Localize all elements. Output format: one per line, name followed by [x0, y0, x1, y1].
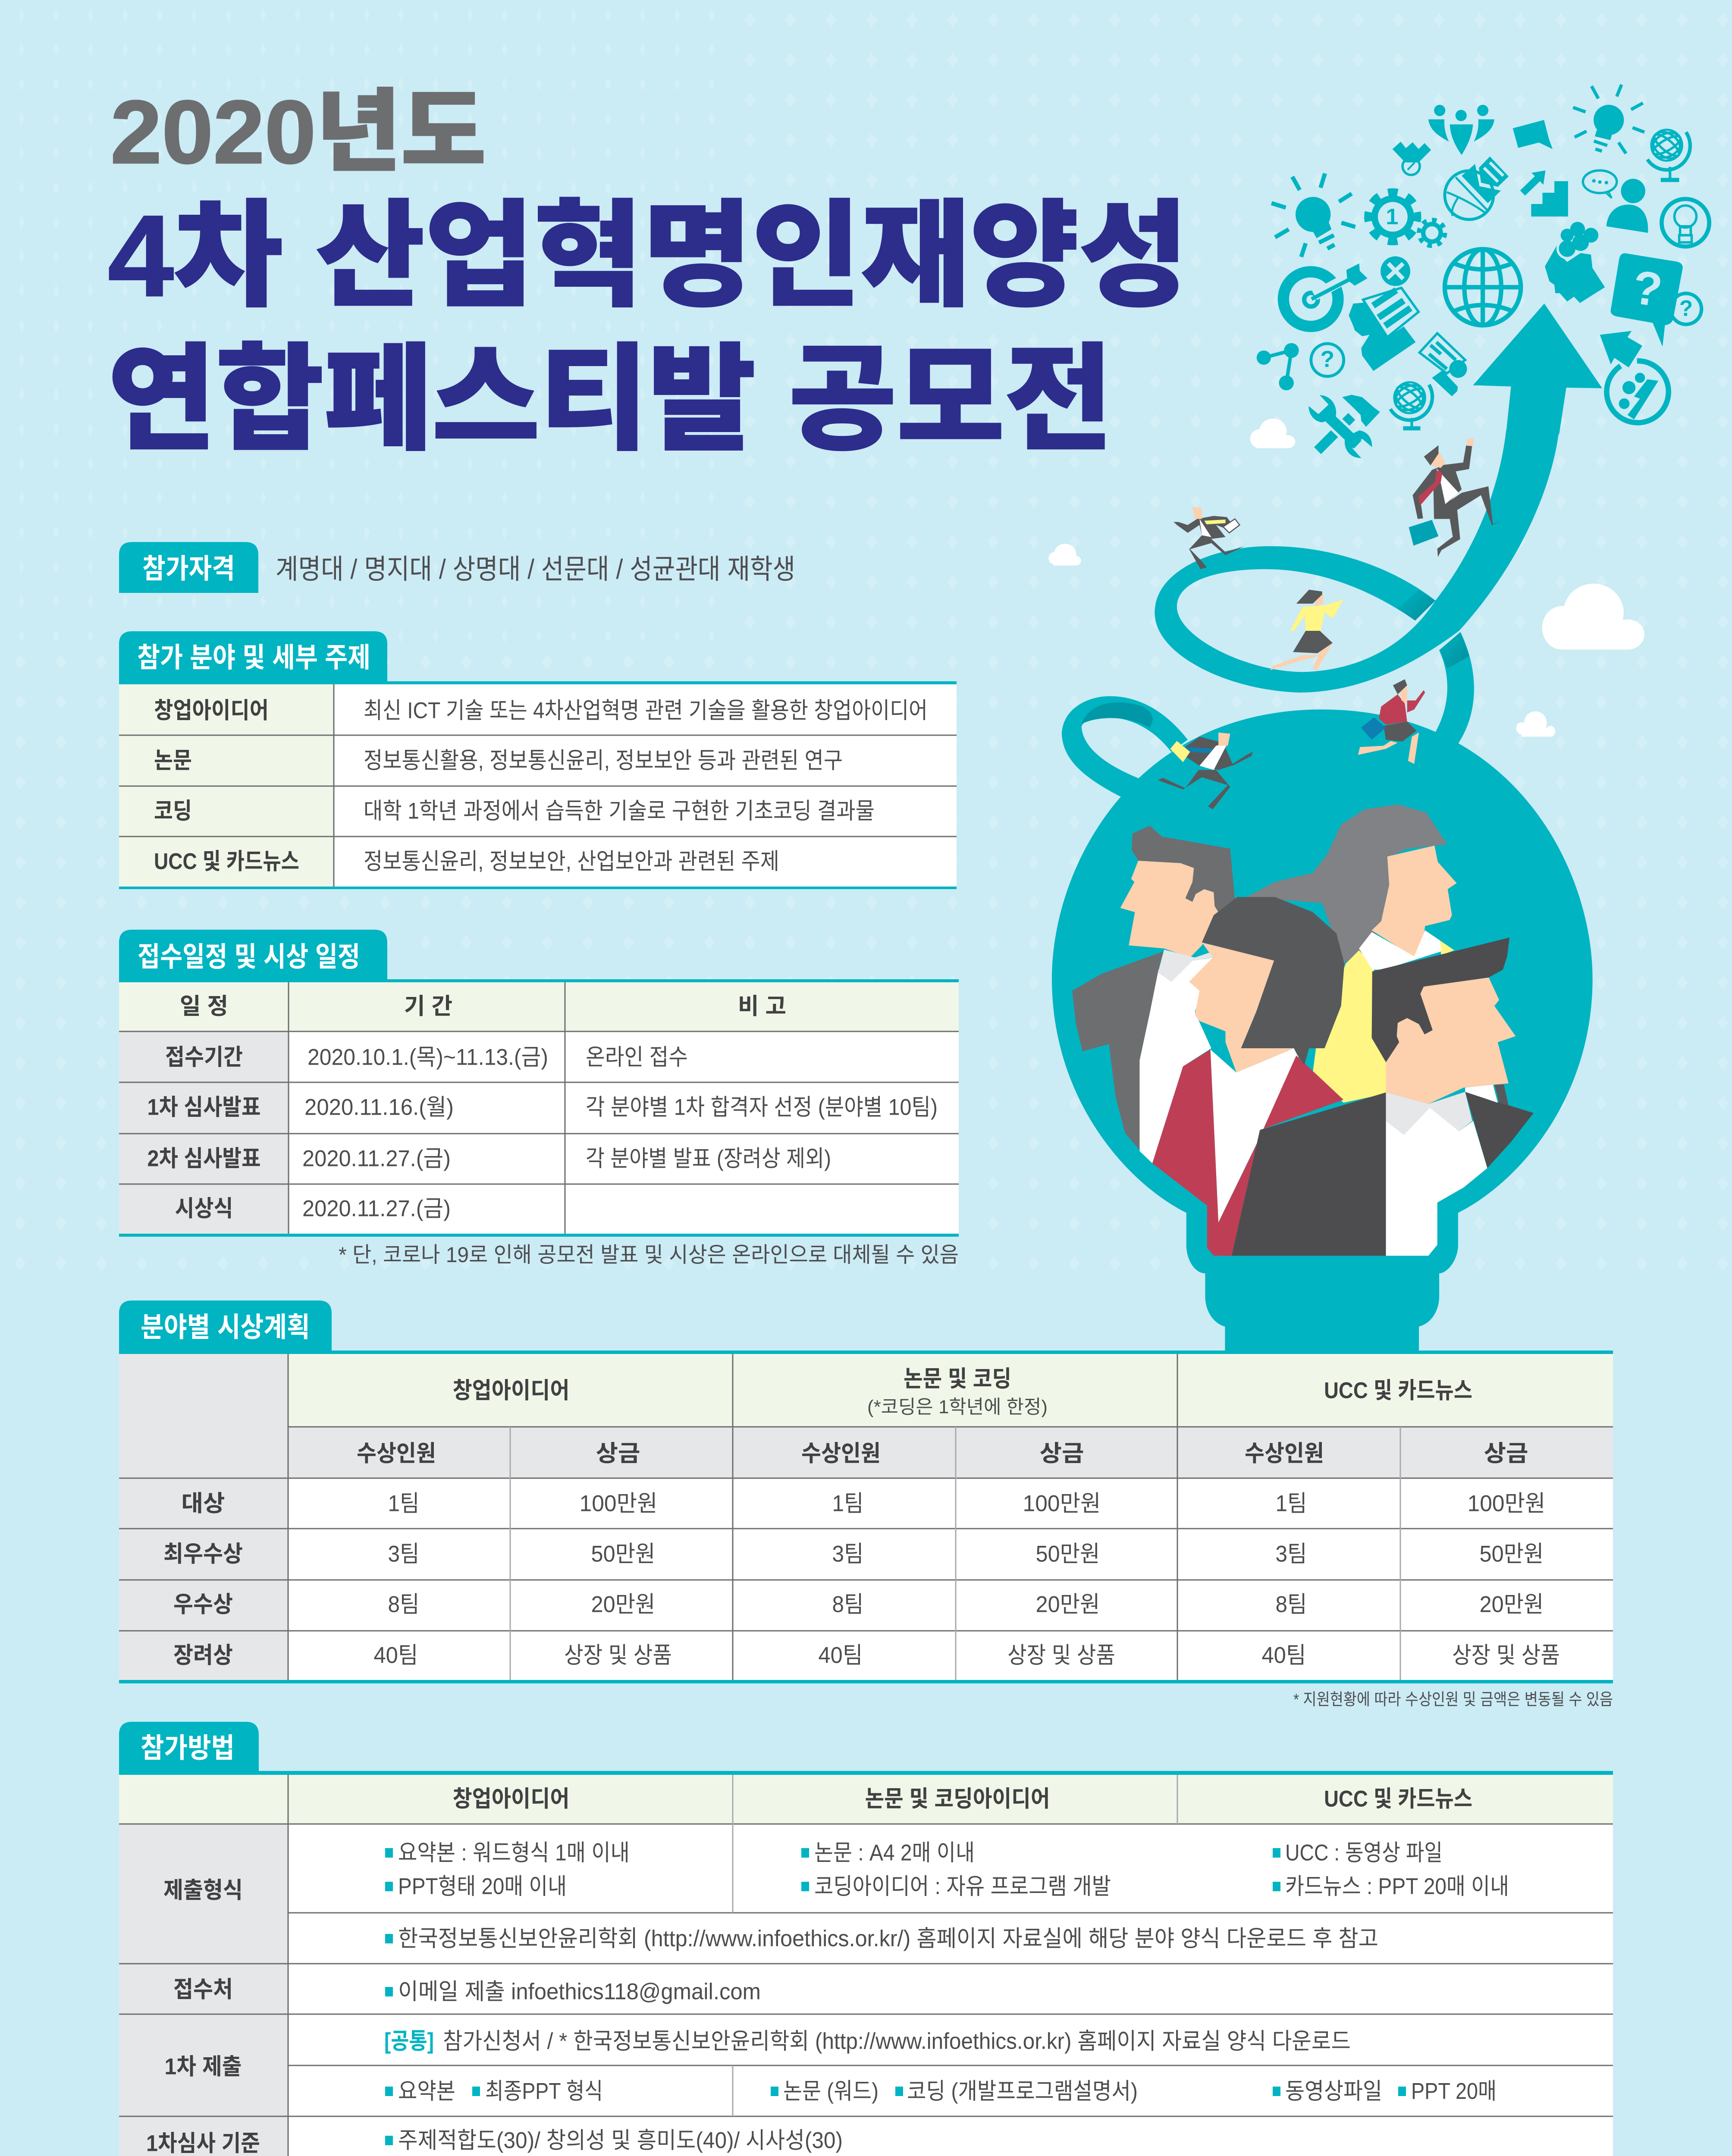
submission format text [398, 1840, 1509, 1952]
icon: head with document [1349, 256, 1418, 371]
submission format text: PPT형태 20매 이내 [398, 1874, 567, 1899]
first round submission: 요약본 [398, 2078, 455, 2104]
schedule notes: 온라인 접수 [586, 1044, 688, 1070]
award values: 상장 및 상품 [1452, 1643, 1560, 1668]
award values: 8팀 [388, 1592, 419, 1617]
award values: 상장 및 상품 [564, 1643, 672, 1668]
award values: 100만원 [1023, 1491, 1101, 1516]
icon: speech flag [1513, 120, 1553, 149]
award values: 100만원 [1467, 1491, 1546, 1516]
schedule stages: 1차 심사발표 [147, 1094, 260, 1120]
award values: 8팀 [1276, 1592, 1307, 1617]
schedule dates: 2020.11.16.(월) [304, 1094, 454, 1120]
icon: wire globe top [1647, 127, 1690, 182]
illustration: rising arrow and lightbulb [1048, 304, 1644, 1352]
schedule stages [147, 1044, 260, 1221]
award rank labels: 우수상 [173, 1592, 233, 1617]
icon: head with thought cloud [1545, 222, 1605, 303]
award values: 상장 및 상품 [1007, 1643, 1115, 1668]
arrow head and shaft [1473, 304, 1602, 434]
table row labels: UCC 및 카드뉴스 [154, 849, 299, 874]
award values [373, 1491, 1560, 1668]
eligibility: 참가자격 [142, 553, 235, 584]
award values: 1팀 [832, 1491, 863, 1516]
icon: arrow up left [1600, 331, 1642, 367]
panel: schedule [119, 930, 959, 1267]
icon: medal [1393, 141, 1431, 175]
submission format text: 논문 : A4 2매 이내 [814, 1840, 975, 1865]
award values: 50만원 [1036, 1541, 1100, 1567]
award values: 3팀 [388, 1541, 419, 1567]
submission format text: 요약본 : 워드형식 1매 이내 [398, 1840, 630, 1865]
runner: woman in red [1358, 679, 1425, 764]
award sub headers [357, 1441, 1528, 1466]
award values: 8팀 [832, 1592, 863, 1617]
schedule notes [586, 1044, 938, 1171]
icon: wrench and hammer [1308, 395, 1380, 458]
method column headers: 논문 및 코딩아이디어 [865, 1786, 1050, 1812]
icon: bulb in circle [1662, 199, 1709, 247]
lightbulb body [1052, 709, 1593, 1352]
icon: gears [1368, 192, 1445, 246]
award sub headers: 상금 [596, 1441, 640, 1466]
schedule headers: 일 정 [180, 993, 228, 1019]
title [108, 82, 1188, 464]
award sub headers: 수상인원 [801, 1441, 881, 1466]
submission format text: 코딩아이디어 : 자유 프로그램 개발 [814, 1874, 1111, 1899]
table row descriptions [364, 698, 928, 874]
table row descriptions: 대학 1학년 과정에서 습득한 기술로 구현한 기초코딩 결과물 [364, 799, 875, 824]
award values: 1팀 [388, 1491, 419, 1516]
cloud [1250, 419, 1295, 448]
award rank labels: 최우수상 [163, 1541, 243, 1567]
award category headers [453, 1366, 1472, 1418]
schedule notes: 각 분야별 발표 (장려상 제외) [586, 1146, 831, 1171]
icon: wire globe bottom [1390, 379, 1432, 430]
award values: 3팀 [1276, 1541, 1307, 1567]
panel: schedule: 접수일정 및 시상 일정 [138, 941, 360, 972]
method row labels [146, 1877, 260, 2156]
icon: light bulb left [1271, 173, 1355, 257]
schedule dates: 2020.11.27.(금) [302, 1146, 451, 1171]
icon: question circle [1311, 344, 1344, 376]
panel: categories and topics: 참가 분야 및 세부 주제 [137, 642, 370, 673]
award values: 20만원 [591, 1592, 656, 1617]
panel: awards plan: 분야별 시상계획 [141, 1312, 310, 1343]
icon: circle with climbers [1606, 361, 1669, 423]
schedule notes: 각 분야별 1차 합격자 선정 (분야별 10팀) [586, 1094, 938, 1120]
table row descriptions: 정보통신윤리, 정보보안, 산업보안과 관련된 주제 [364, 849, 779, 874]
award values: 40팀 [373, 1643, 418, 1668]
method column headers [453, 1786, 1472, 1812]
clouds [1048, 544, 1644, 737]
panel: how to participate: 참가방법 [141, 1733, 235, 1764]
method column headers: 창업아이디어 [453, 1786, 569, 1812]
award values: 3팀 [832, 1541, 863, 1567]
runner: woman in yellow [1270, 590, 1343, 671]
icon: question bubbles: ? [1629, 260, 1666, 317]
first round submission: PPT 20매 [1411, 2078, 1497, 2104]
table row labels [154, 698, 299, 874]
first round submission: 참가신청서 / * 한국정보통신보안윤리학회 (http://www.infoethics.or.kr) 홈페이지 자료실 양식 다운로드 [443, 2028, 1351, 2054]
submission format text: 카드뉴스 : PPT 20매 이내 [1285, 1874, 1509, 1899]
first round submission: 동영상파일 [1285, 2078, 1382, 2104]
icon: person with speech bubble [1583, 170, 1648, 233]
runner: man with clipboard [1173, 507, 1244, 569]
icon: team of three [1428, 105, 1494, 155]
first round submission [384, 2028, 1497, 2104]
text: eligible schools: 계명대 / 명지대 / 상명대 / 선문대 / 성균관대 재학생 [276, 554, 795, 585]
icon: question bubbles [1611, 253, 1701, 347]
schedule dates: 2020.10.1.(목)~11.13.(금) [307, 1044, 548, 1070]
runner: man with blue tie [1158, 733, 1253, 809]
illustration: floating icons [1250, 85, 1709, 557]
award category headers: 논문 및 코딩 [904, 1366, 1011, 1392]
award category headers: (*코딩은 1학년에 한정) [867, 1396, 1048, 1418]
method row labels: 접수처 [173, 1977, 233, 2002]
title line: main one: 4차 산업혁명인재양성 [108, 191, 1188, 320]
first round submission: [공통] [384, 2028, 434, 2054]
award sub headers: 상금 [1039, 1441, 1084, 1466]
schedule headers: 기 간 [404, 993, 452, 1019]
icon: document with person [1419, 333, 1467, 396]
submission format text: 한국정보통신보안윤리학회 (http://www.infoethics.or.kr/) 홈페이지 자료실에 해당 분야 양식 다운로드 후 참고 [398, 1926, 1378, 1952]
panel: awards plan [119, 1300, 1613, 1709]
submission format text: UCC : 동영상 파일 [1285, 1840, 1443, 1865]
award sub headers: 수상인원 [1245, 1441, 1324, 1466]
award category headers: UCC 및 카드뉴스 [1324, 1378, 1472, 1403]
award values: 20만원 [1479, 1592, 1544, 1617]
icon: share nodes [1257, 343, 1299, 390]
icon: pie globe and documents [1445, 157, 1509, 219]
icon: target with arrow [1283, 263, 1368, 326]
schedule stages: 2차 심사발표 [147, 1146, 260, 1171]
first round submission: 최종PPT 형식 [485, 2078, 603, 2104]
icon: question bubbles: ? [1679, 295, 1693, 320]
table row labels: 코딩 [154, 799, 192, 824]
award values: 100만원 [580, 1491, 657, 1516]
first round submission: 코딩 (개발프로그램설명서) [907, 2078, 1138, 2104]
method column headers: UCC 및 카드뉴스 [1324, 1786, 1472, 1812]
table row labels: 논문 [154, 748, 192, 774]
table row descriptions: 최신 ICT 기술 또는 4차산업혁명 관련 기술을 활용한 창업아이디어 [364, 698, 928, 724]
table row labels: 창업아이디어 [154, 698, 269, 724]
tab heading [119, 1300, 332, 1352]
award values: 40팀 [819, 1643, 863, 1668]
award values: 50만원 [1479, 1541, 1544, 1567]
eligibility [119, 542, 795, 593]
spiral band [1048, 430, 1644, 1352]
panel: how to participate [119, 1722, 1613, 2156]
footnote: * 단, 코로나 19로 인해 공모전 발표 및 시상은 온라인으로 대체될 수 있음 [339, 1243, 959, 1267]
bullets [385, 1848, 1406, 2156]
tab heading [119, 631, 387, 683]
title line: main two: 연합페스티발 공모전 [108, 335, 1113, 464]
tab heading [119, 1722, 259, 1772]
submission address: 이메일 제출 infoethics118@gmail.com [398, 1979, 761, 2004]
icon: gears: 1 [1386, 204, 1399, 229]
first round criteria: 주제적합도(30)/ 창의성 및 흥미도(40)/ 시사성(30) [398, 2128, 843, 2153]
method row labels: 1차 제출 [165, 2054, 242, 2079]
runner: man climbing the arrow [1409, 439, 1500, 557]
tab heading [119, 930, 387, 980]
tab: eligibility [119, 542, 258, 593]
people inside the bulb [1072, 805, 1534, 1256]
award sub headers: 수상인원 [357, 1441, 436, 1466]
first round submission: 논문 (워드) [783, 2078, 879, 2104]
icon: question circle: ? [1320, 346, 1334, 372]
title line: year: 2020년도 [110, 82, 486, 182]
panel: categories and topics [119, 631, 957, 889]
schedule dates: 2020.11.27.(금) [302, 1196, 451, 1221]
schedule stages: 접수기간 [165, 1044, 243, 1070]
schedule headers [180, 993, 786, 1019]
table row descriptions: 정보통신활용, 정보통신윤리, 정보보안 등과 관련된 연구 [364, 748, 843, 774]
award values: 20만원 [1036, 1592, 1100, 1617]
footnote: * 지원현황에 따라 수상인원 및 금액은 변동될 수 있음 [1293, 1691, 1613, 1709]
method row labels: 1차심사 기준 [146, 2131, 260, 2156]
schedule stages: 시상식 [175, 1196, 233, 1221]
award values: 50만원 [591, 1541, 656, 1567]
schedule headers: 비 고 [738, 993, 786, 1019]
method row labels: 제출형식 [163, 1877, 243, 1903]
award category headers: 창업아이디어 [453, 1378, 569, 1403]
award rank labels: 장려상 [173, 1643, 233, 1668]
icon: stairs with arrow [1522, 170, 1568, 216]
award sub headers: 상금 [1484, 1441, 1528, 1466]
award values: 1팀 [1276, 1491, 1307, 1516]
icon: globe [1445, 249, 1521, 325]
award values: 40팀 [1262, 1643, 1306, 1668]
award rank labels: 대상 [181, 1491, 225, 1516]
icon: light bulb right [1573, 85, 1644, 154]
schedule dates [302, 1044, 548, 1221]
award rank labels [163, 1491, 243, 1668]
